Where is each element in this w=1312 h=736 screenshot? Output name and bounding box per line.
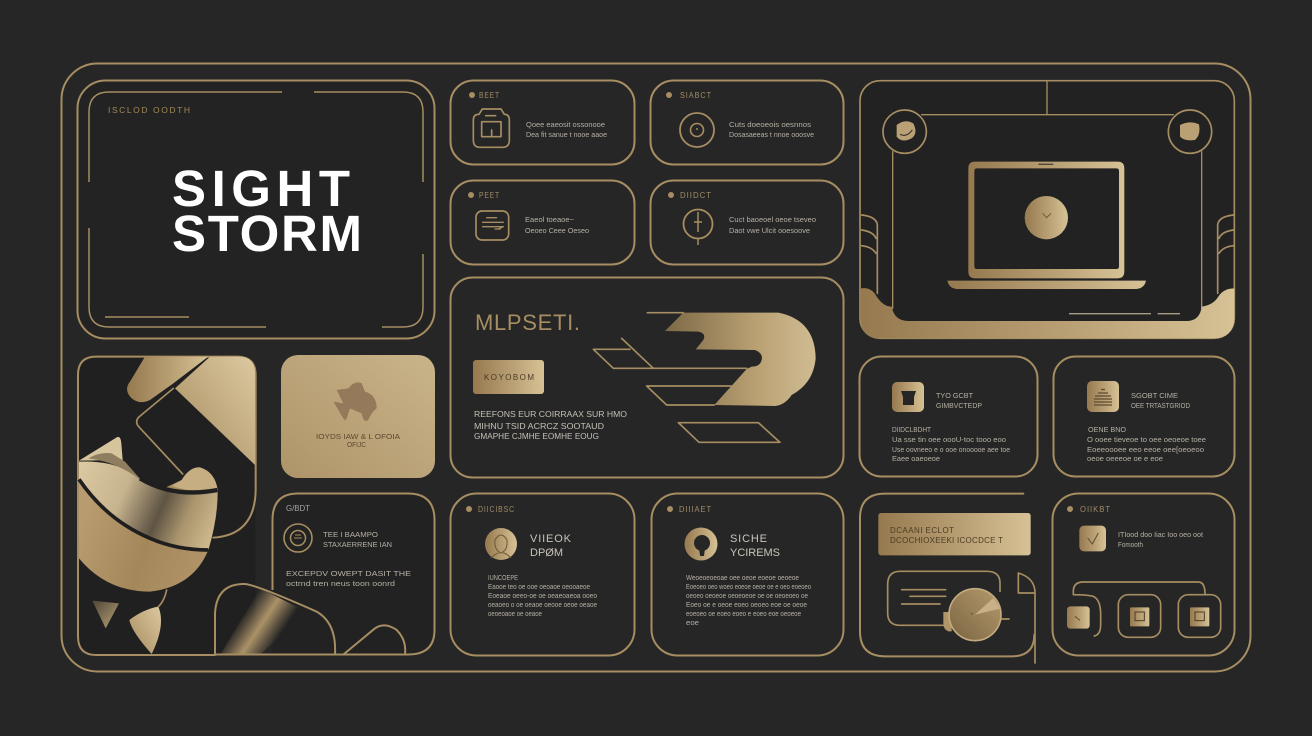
panel: gold card (281, 355, 435, 478)
text: card copy (729, 217, 816, 235)
panel: abstract gold artwork (78, 357, 335, 655)
text: card copy: GIMBVCTEDP (936, 403, 982, 410)
text: note lines (286, 532, 411, 588)
card: sgobt cime (1054, 356, 1234, 476)
text: card copy: Eoeo oe e oeoe eoeo oeoeo eoe oe oeoe (686, 602, 807, 609)
icon: dark bulb medallion (684, 528, 718, 560)
text: plate label: DCOCHIOXEEKI ICOCDCE T (890, 536, 1003, 545)
text: card copy (1087, 393, 1206, 463)
card: siche yciems: DIIIAET (679, 505, 712, 514)
icon: left badge (883, 110, 926, 153)
text: card caption: IOYDS IAW & L OFOIA (316, 434, 400, 441)
card: beet (450, 80, 634, 164)
text: card copy: Dosasaeeas t nnoe ooosve (729, 132, 814, 139)
text: note lines: octrnd tren neus toon oonrd (286, 581, 395, 588)
card: oikbt (1052, 494, 1234, 656)
text: card copy: oeoeoaoe oe oeaoe (488, 611, 542, 618)
icon: cup tile (892, 382, 924, 412)
panel: laptop (860, 81, 1234, 338)
text: card copy: VIIEOK (530, 533, 572, 545)
icon: speed swoosh (593, 313, 816, 442)
text: card copy: Cuct baoeoel oeoe tseveo (729, 217, 816, 224)
text: card copy (488, 533, 597, 618)
icon: head medallion (485, 528, 517, 560)
text: card copy: YCIREMS (730, 547, 780, 559)
icon: folder (476, 211, 509, 240)
text: body lines: MIHNU TSID ACRCZ SOOTAUD (474, 422, 604, 431)
text: card copy: Eaooe teo oe ooe oeoaoe oeooaeoe (488, 584, 590, 591)
text: card copy: Daot vwe Ulcit ooesoove (729, 228, 810, 235)
text: card copy: TYO GCBT (936, 393, 974, 400)
text: card copy: Cuts doeoeois oesnnos (729, 122, 812, 129)
text: card copy: eoe (686, 620, 699, 627)
text: card copy: ITIood doo Iiac Ioo oeo oot (1118, 532, 1203, 539)
icon: laptop (947, 162, 1146, 289)
text: card copy: Weoeoeoeoae oee oeoe eoeoe oeoeoe (686, 575, 799, 582)
gold bottom band (861, 288, 1234, 338)
plate: gold label (878, 513, 1031, 555)
text: card copy: Dea fit sanue t nooe aaoe (526, 132, 607, 139)
icon: ring (284, 524, 312, 552)
shape: outlined diagonal bar (137, 388, 183, 474)
text: card copy (729, 122, 814, 139)
shape: upper gold wedge (175, 357, 255, 465)
text: card copy: Eoeeoooee eeo eeoe oee[oeoeoo (1087, 447, 1204, 454)
text: card copy (525, 217, 589, 235)
card: oikbt: OIIKBT (1080, 505, 1111, 514)
side arches (862, 215, 1233, 293)
outline: small rounded tab (344, 625, 405, 654)
text: card copy: oeaoeo o oe oeaoe oeooe oeoe oeaoe (488, 602, 597, 609)
label: small heading: ISCLOD OODTH (108, 105, 190, 115)
text: card copy: Eoeaoe oeeo-oe oe oeaeoaeoa ooeo (488, 593, 597, 600)
text: card copy: SGOBT CIME (1131, 393, 1178, 400)
text: body lines (474, 410, 627, 441)
text: card copy: DIIDCLBDHT (892, 427, 932, 434)
text: card copy: Eaeol toeaoe~ (525, 217, 574, 224)
card: siche yciems (652, 494, 844, 656)
card: siabct (650, 80, 844, 164)
text: card copy (526, 122, 607, 139)
card: viieok dpom (450, 494, 634, 656)
text: card copy: OENE BNO (1088, 427, 1127, 434)
title: SIGHT (172, 160, 350, 217)
text: card copy: oeoeo oeoeoe oeoeoeoe oe oe oeoeoeo oe (686, 593, 808, 600)
panel interiors (78, 80, 1234, 654)
text: card copy: DPØM (530, 547, 563, 559)
text: body lines: GMAPHE CJMHE EOMHE EOUG (474, 432, 599, 441)
card: peet (450, 180, 634, 264)
text: body lines: REEFONS EUR COIRRAAX SUR HMO (474, 410, 627, 419)
icon: compass (684, 210, 712, 245)
text: card copy: Qoee eaeosit ossonooe (526, 122, 605, 129)
text: card copy: Ua sse tin oee oooU-toc tooo eoo (892, 437, 1006, 444)
icon: target (680, 113, 714, 147)
text: card copy: oeoe oeeeoe oe e eoe (1087, 456, 1163, 463)
card: diidct: DIIDCT (680, 191, 712, 200)
panel: title (78, 80, 434, 338)
panel: dial (860, 494, 1035, 663)
text: note lines: TEE I BAAMPO (323, 532, 379, 539)
heading: MLPSETI. (475, 310, 580, 335)
card: viieok dpom: DIICIBSC (478, 505, 515, 514)
card: diidct (650, 180, 844, 264)
shape: upper gold pill (127, 357, 208, 402)
text: plate label (890, 526, 1003, 545)
icon: page fold (1018, 573, 1035, 663)
icon: checklist tiles (1067, 526, 1221, 637)
text: card copy (892, 393, 1010, 463)
card: beet: BEET (479, 91, 500, 100)
text: card copy: Use oovneeo e o ooe onooooe aee toe (892, 447, 1010, 454)
icon: right badge (1168, 110, 1212, 153)
shape: lower outlined form (215, 584, 335, 655)
text: note lines: EXCEPDV OWEPT DASIT THE (286, 571, 411, 578)
panel: contact note (215, 494, 434, 654)
icon: jar (473, 109, 509, 147)
text: card copy: O ooee tieveoe to oee oeoeoe toee (1087, 437, 1206, 444)
card: siabct: SIABCT (680, 91, 712, 100)
text: card copy: Eoeoeo oeo woeo eoeoe oeoe oe e oeo eoeoeo (686, 584, 811, 591)
icon: dial (943, 589, 1001, 641)
text: card caption (316, 434, 400, 449)
panel: central swoosh (450, 278, 844, 478)
label: small header: G/BDT (286, 504, 310, 513)
button (473, 360, 544, 394)
text: card copy: SICHE (730, 533, 767, 545)
text: note lines: STAXAERRENE IAN (323, 542, 392, 549)
text: card copy: OEE TRTASTGRIOD (1131, 403, 1190, 410)
card: peet: PEET (479, 191, 500, 200)
infographic canvas (60, 62, 1252, 672)
shape: bowl (79, 437, 218, 592)
icon: blob emblem (333, 382, 377, 421)
text: card copy: IUNCOEPE (488, 575, 518, 582)
text: card copy: Oeoeo Ceee Oeseo (525, 228, 589, 235)
shape: small triangle (92, 601, 119, 628)
title (172, 160, 362, 262)
text: card copy: Fomooth (1118, 542, 1143, 549)
icon: stacked tile (1087, 381, 1119, 412)
outer frame (62, 64, 1250, 672)
title: STORM (172, 205, 362, 262)
text: card copy (1118, 532, 1203, 549)
text: plate label: DCAANI ECLOT (890, 526, 954, 535)
text: card copy: Eaee oaeoeoe (892, 456, 940, 463)
text: card copy: eoeoeo oe eoeo eoeo e eoeo eoe oeoeoe (686, 611, 801, 618)
outline: speech box (888, 571, 1009, 625)
button: KOYOBOM (484, 373, 534, 382)
card: tyo gcbt (860, 356, 1038, 476)
text: card caption: OFIJC (347, 442, 366, 449)
text: card copy (686, 533, 811, 627)
shape: gold teardrop (129, 607, 161, 654)
